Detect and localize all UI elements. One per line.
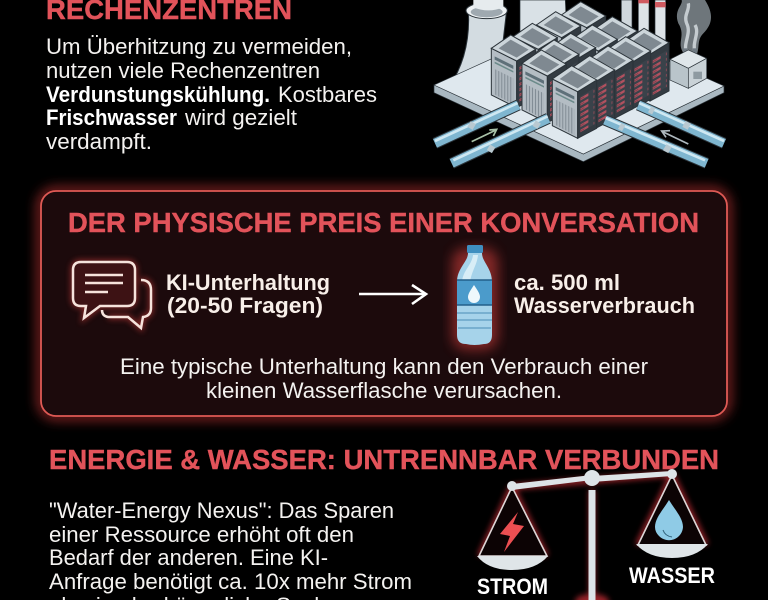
- small building with smoke: [670, 0, 711, 88]
- panel caption: kleinen Wasserflasche verursachen.: [206, 378, 562, 403]
- text block: Verdunstungskuehlung: Kostbares: [278, 82, 377, 107]
- flow arrows: [472, 129, 688, 144]
- icon: lightning bolt: [500, 512, 524, 552]
- text block: Verdunstungskuehlung: Frischwasser: [46, 105, 177, 130]
- panel caption: [120, 354, 648, 403]
- panel caption: Eine typische Unterhaltung kann den Verbrauch einer: [120, 354, 648, 379]
- text block: water-energy nexus: [49, 498, 412, 600]
- icon: balance scale: [477, 469, 715, 600]
- label: ca. 500 ml: ca. 500 ml: [514, 270, 620, 295]
- label: ca. 500 ml: [514, 270, 695, 318]
- label: KI-Unterhaltung: (20-50 Fragen): [167, 293, 323, 318]
- text block: Verdunstungskuehlung: nutzen viele Rechenzentren: [46, 58, 320, 83]
- chimneys: [621, 0, 666, 43]
- text block: Verdunstungskuehlung: [46, 34, 377, 154]
- arrow: [359, 285, 426, 304]
- icon: water drop: [655, 500, 683, 540]
- label: KI-Unterhaltung: KI-Unterhaltung: [166, 270, 330, 295]
- text block: Verdunstungskuehlung: Verdunstungskühlung.: [46, 82, 270, 107]
- panel heading: DER PHYSISCHE PREIS EINER KONVERSATION: [68, 207, 699, 238]
- text block: Verdunstungskuehlung: verdampft.: [46, 129, 152, 154]
- panel frame: [41, 191, 727, 416]
- heading: energy and water: ENERGIE & WASSER: UNTRENNBAR VERBUNDEN: [49, 444, 719, 475]
- label: Wasser: WASSER: [629, 563, 715, 588]
- server racks: [491, 2, 669, 138]
- icon: water bottle: [452, 245, 498, 350]
- text block: water-energy nexus: "Water-Energy Nexus": Das Sparen: [49, 498, 394, 523]
- text block: water-energy nexus: Anfrage benötigt ca. 10x mehr Strom: [49, 569, 412, 594]
- label: Strom: STROM: [477, 574, 548, 599]
- text block: Verdunstungskuehlung: Um Überhitzung zu vermeiden,: [46, 34, 352, 59]
- water pipes: [435, 103, 724, 163]
- illustration: isometric data center: [434, 0, 724, 163]
- panel: physical price of a conversation: [41, 191, 727, 416]
- cooling towers: [453, 0, 567, 97]
- text block: water-energy nexus: Bedarf der anderen. Eine KI-: [49, 545, 328, 570]
- right pan: [636, 475, 708, 558]
- beam and pole: [507, 469, 677, 600]
- label: ca. 500 ml: Wasserverbrauch: [514, 293, 695, 318]
- icon: chat bubbles: [73, 262, 151, 328]
- text block: Verdunstungskuehlung: wird gezielt: [184, 105, 297, 130]
- base plate: [434, 20, 724, 162]
- text block: water-energy nexus: einer Ressource erhöht oft den: [49, 522, 354, 547]
- label: KI-Unterhaltung: [166, 270, 330, 318]
- scale glow: [480, 474, 706, 600]
- left pan: [477, 487, 548, 570]
